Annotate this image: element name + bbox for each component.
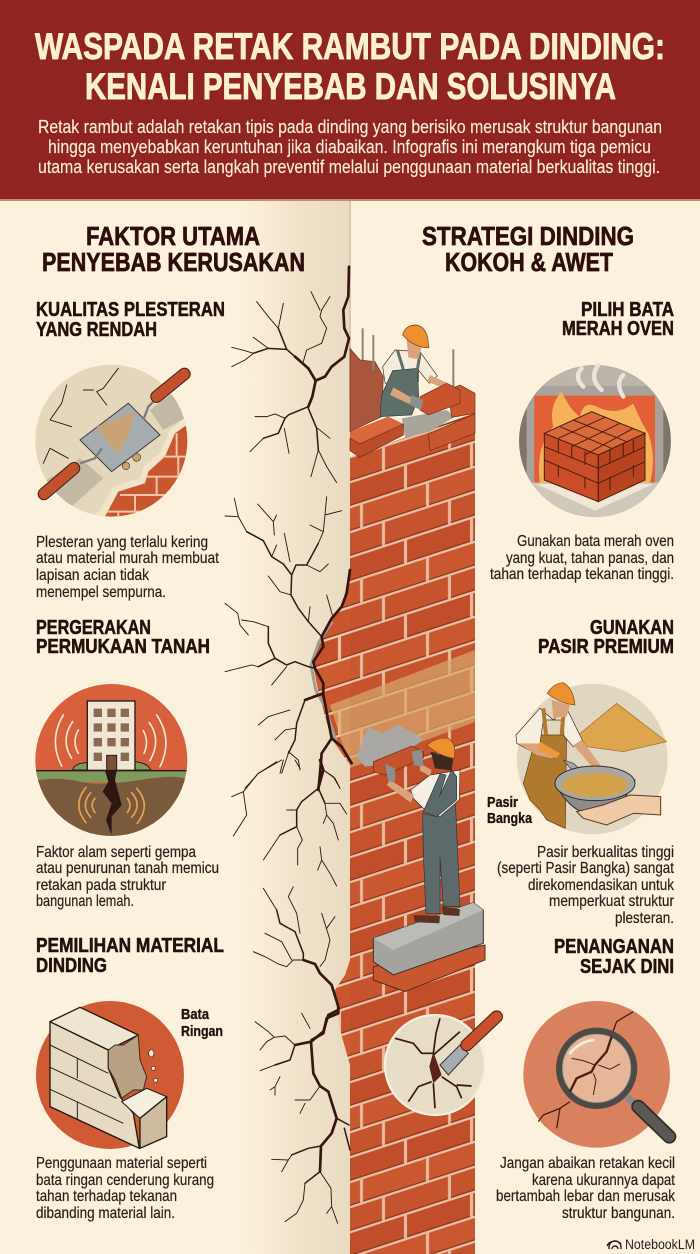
cracked plaster wall (232, 201, 351, 1254)
label: bata ringan: Bata (181, 1006, 210, 1023)
unfinished back wall (350, 348, 383, 432)
description (496, 1155, 676, 1222)
description: menempel sempurna. (36, 584, 166, 601)
left column heading: PENYEBAB KERUSAKAN (42, 247, 305, 277)
description: Pasir berkualitas tinggi (537, 844, 674, 861)
weathered tan bricks (330, 650, 475, 768)
description: plesteran. (615, 910, 674, 927)
panel: gunakan pasir premium (487, 617, 675, 927)
description: lapisan acian tidak (36, 567, 150, 584)
heading: KUALITAS PLESTERAN (36, 299, 225, 321)
intro paragraph (38, 117, 662, 177)
label: bata ringan: Ringan (181, 1023, 223, 1040)
heading: PERMUKAAN TANAH (36, 636, 210, 658)
top courses (402, 410, 455, 437)
brick column (310, 380, 475, 1254)
heading: PEMILIHAN MATERIAL (36, 935, 224, 957)
panel: pemilihan material dinding (36, 935, 224, 1222)
icon: trowel on plaster (35, 365, 200, 520)
heading (562, 299, 674, 340)
heading: SEJAK DINI (580, 956, 674, 978)
heading (36, 935, 224, 977)
heading (554, 936, 674, 978)
icon: broken lightweight brick block (36, 1001, 184, 1149)
description: memperkuat struktur (549, 893, 675, 910)
heading: DINDING (36, 955, 107, 977)
description: tahan terhadap tekanan (36, 1188, 177, 1205)
description: karena ukurannya dapat (532, 1172, 675, 1189)
heading: PILIH BATA (581, 299, 674, 321)
icon: building on earthquake (33, 684, 190, 837)
description (36, 1155, 214, 1222)
worker legs and boots (423, 793, 460, 913)
icon: magnifier over crack (523, 1001, 670, 1148)
right column heading (422, 221, 634, 277)
description: tahan terhadap tekanan tinggi. (490, 566, 674, 583)
label: pasir bangka: Pasir (487, 794, 518, 811)
worker placing brick (380, 325, 460, 417)
header band (0, 0, 700, 201)
heading: PERGERAKAN (36, 617, 151, 639)
mortar patch (357, 725, 423, 767)
panel: kualitas plesteran (35, 299, 225, 601)
icon: notebook arcs (607, 1241, 621, 1249)
label: bata ringan (181, 1006, 223, 1040)
label: pasir bangka (487, 794, 533, 827)
cracks bottom (255, 1010, 350, 1223)
NotebookLM logo: NotebookLM (625, 1237, 695, 1252)
inset: crack repair on column (385, 1015, 497, 1115)
left column heading: FAKTOR UTAMA (86, 221, 260, 251)
panel: penanganan sejak dini (496, 936, 676, 1222)
description: struktur bangunan. (562, 1205, 675, 1222)
description: bata ringan cenderung kurang (36, 1172, 214, 1189)
cracks middle (225, 497, 352, 790)
description (36, 844, 219, 910)
description: atau material murah membuat (36, 550, 219, 567)
description: atau penurunan tanah memicu (36, 860, 219, 877)
left column heading (42, 221, 305, 277)
heading: PASIR PREMIUM (538, 636, 674, 658)
heading (36, 299, 225, 341)
description: Penggunaan material seperti (36, 1155, 207, 1172)
concrete platform (373, 945, 485, 992)
icon: worker mixing sand (516, 683, 668, 834)
description: retakan pada struktur (36, 877, 167, 894)
heading (538, 617, 674, 658)
description: direkomendasikan untuk (528, 877, 675, 894)
heading: YANG RENDAH (36, 319, 157, 341)
right column heading: STRATEGI DINDING (422, 221, 634, 251)
right column heading: KOKOH & AWET (445, 247, 613, 277)
panel: pergerakan permukaan tanah (33, 617, 219, 910)
label: pasir bangka: Bangka (487, 810, 533, 827)
title (35, 26, 665, 107)
panel: pilih bata merah oven (490, 299, 674, 583)
description (497, 844, 675, 927)
description: Plesteran yang terlalu kering (36, 534, 208, 551)
icon: bricks in oven (517, 365, 673, 530)
cracks upper (232, 267, 349, 483)
description: dibanding material lain. (36, 1205, 175, 1222)
heading: PENANGANAN (554, 936, 674, 958)
brick being laid (373, 746, 423, 775)
description (36, 534, 219, 601)
description: Faktor alam seperti gempa (36, 844, 196, 861)
heading: GUNAKAN (590, 617, 674, 639)
worker laying brick on platform (357, 725, 485, 992)
description: bangunan lemah. (36, 893, 134, 910)
heading (36, 617, 210, 658)
column top with worker (350, 325, 475, 457)
description (490, 533, 674, 583)
cracks lower middle (232, 760, 347, 1040)
heading: MERAH OVEN (562, 318, 674, 340)
